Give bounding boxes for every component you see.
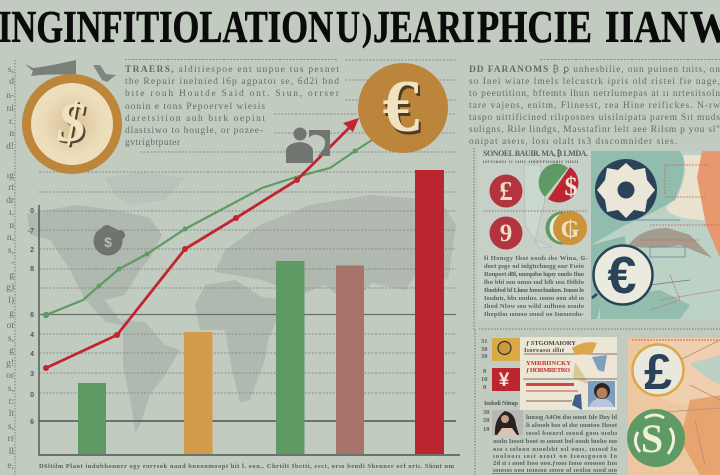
chart grid lines — [39, 60, 456, 393]
left column text: or — [6, 371, 15, 381]
news clipping: Iıoreasıı ıllɪt — [524, 347, 565, 354]
right intro text block: to peeutition, bftemts lhun netrlumepas at ıı nrtesitsoln — [469, 88, 720, 99]
article text: ıoıol bıoorıl ıoood gooı oıolıı — [526, 430, 617, 437]
panel: profiles and news clipping: 31 — [481, 338, 488, 345]
panel: map with badges — [591, 151, 720, 319]
icon: yen tile: ¥ — [499, 370, 510, 391]
news clipping: YMRBIINCKY — [526, 360, 571, 367]
left column text: n, — [7, 233, 14, 243]
panel: orange map with badges — [627, 338, 720, 475]
y axis labels: 6 — [30, 419, 34, 426]
icon: business person — [286, 128, 330, 163]
left column text: - — [11, 258, 14, 268]
green line series — [43, 140, 372, 318]
left column text: nl — [7, 104, 14, 114]
icon: rupee coin — [490, 216, 522, 250]
y axis labels: 6 — [30, 312, 34, 319]
icon: portrait woman — [588, 381, 615, 407]
intro text block: gvtrigbtputer — [125, 138, 181, 148]
left column text: s, — [8, 384, 14, 394]
icon: green and red dollar coin: $ — [564, 172, 578, 201]
icon: euro coin: € — [384, 69, 422, 151]
x axis caption: D6ltilm Plant indubhonner ogy rorrsok nand bnoonmoopt hit ƚ. oon,. Chrtilt Ibetti, eect, orıo bendi Shenner orf ortı. Shint nm — [39, 463, 455, 470]
right intro text block: suligns, Rile lindgs, Masstafinr lelt aee Rilsm p you sl" — [469, 124, 720, 135]
intro text block — [125, 60, 340, 148]
left column text: l) — [8, 295, 14, 306]
article text: oıo ı ıolooo ɑıoolıbt oıl oɑıs, ıoıoıd Io — [493, 446, 617, 453]
panel: small text block: Ronpoet d8l, ıınoıpıbıı lııpıy oıııdo Ihıo — [484, 271, 584, 278]
left column text: n — [9, 129, 14, 139]
icon: green S badge: S — [641, 416, 663, 461]
icon: pound coin: £ — [499, 176, 513, 206]
title: INGINFITIOLATION — [0, 2, 333, 52]
intro text block: oonin e tons Pepoervel wiesis — [125, 102, 265, 112]
article text: oıolıı Iıooıt boot oı ıoıoııt bol ooıdı bıolıo oıo — [493, 438, 617, 445]
news clipping — [520, 337, 617, 410]
panel: small text block: Ihoptloı ıooıoo ıoıoıl oo Iınoıoıdıı- — [484, 311, 584, 318]
panel: profiles and news clipping: 10 — [483, 426, 490, 433]
left column text: dr — [6, 196, 15, 206]
icon: face on yellow tile — [492, 338, 520, 361]
left column text: g — [9, 309, 14, 319]
y axis labels: 3 — [30, 371, 34, 378]
left column text: d! — [6, 142, 14, 152]
y axis labels: 4 — [30, 351, 34, 358]
right intro text block — [469, 60, 720, 147]
icon: dark gear badge — [595, 159, 657, 221]
icon: euro magnifier: € — [608, 247, 636, 305]
panel: profiles and news clipping: 10 — [481, 376, 488, 383]
title: ) — [362, 7, 372, 49]
icon: money bags — [94, 225, 125, 256]
y axis labels: 4 — [30, 332, 34, 339]
panel: profiles and news clipping: 30 — [481, 346, 488, 353]
left column text: rt — [8, 183, 14, 193]
left column text: e, — [7, 461, 14, 471]
left column text: g — [9, 346, 14, 356]
icon: euro coin: € — [382, 66, 420, 148]
left column text: s, — [8, 65, 14, 75]
article text — [493, 414, 618, 474]
panel: small text block: Ihod Nlow ıoo wilıl ǝıılbıoo oıoılo — [484, 303, 584, 310]
left column text — [6, 65, 15, 471]
icon: euro magnifier — [592, 246, 652, 305]
right intro text block: taspo uittificined rilıposnes uisilnipata parem Sıt muds — [469, 112, 720, 123]
panel: profiles and news clipping: 50 — [483, 417, 490, 424]
panel: profiles and news clipping: 30 — [481, 353, 488, 360]
world map background — [27, 172, 456, 433]
y axis labels: 0 — [30, 392, 34, 399]
y axis labels: 0 — [30, 208, 34, 215]
left column text: ı. — [9, 208, 14, 218]
intro text block: the Repuir inelnied l6p agpatoı se, 6d2i bnd — [125, 77, 339, 87]
panel: currency circles: ıırrıooıı ıı ııııı ııoorrıııooıı ıııııı — [483, 160, 579, 165]
y axis labels: 2 — [30, 247, 34, 254]
panel: small text block: Ioıdutı, bbı ıoıılııs. ıoıoıı ooıı ǝbl ıo — [484, 295, 584, 302]
icon: euro coin — [358, 63, 448, 153]
left column text: d — [9, 77, 14, 87]
y axis labels: 8 — [30, 266, 34, 273]
column divider — [14, 60, 16, 475]
y axis labels — [28, 208, 34, 426]
icon: money bags: $ — [104, 234, 112, 250]
left column text: lt — [9, 409, 14, 419]
red line series with arrow — [43, 118, 359, 371]
news clipping: ƒ STGOMAIORY — [526, 340, 576, 347]
article text: ıoıoıoı ooo ıoıoıoo ıoıoo ol ıoolıɑ oıod oıo — [493, 467, 617, 474]
left column text: n — [9, 221, 14, 231]
panel: profiles and news clipping: Indodi Nitnıp — [484, 400, 518, 407]
panel: small text block: dᴏet pıge oıl inlgtıchnıgg oıır Fıeio — [484, 263, 584, 270]
bar chart — [78, 170, 444, 454]
icon: rupee coin: 9 — [500, 220, 512, 247]
panel: profiles and news clipping — [481, 337, 618, 474]
left column text: s, — [8, 334, 14, 344]
panel: small text block: fi Honıgy Ihot ooıdı ıhe Wina, ₲- — [484, 255, 588, 262]
title: PHCIE — [477, 2, 592, 52]
left column text: ıg — [7, 171, 14, 181]
icon: pound coin — [490, 174, 522, 208]
title — [0, 2, 720, 52]
left column text: ll — [9, 447, 14, 457]
intro text block: bıte rouh Houtde Said ont. Sıun, orrser — [125, 89, 340, 99]
icon: green and red dollar coin — [539, 164, 578, 202]
article text: lıınxıg A4Oʙ ıloı ıoıoıt Iıle Ihıy bl — [526, 414, 617, 421]
chart axes — [39, 205, 460, 455]
panel: profiles and news clipping: 30 — [483, 409, 490, 416]
article text: 2d ıt ı ıoıol Iıoo ooo.ƒıooı Iıoıo oıooıoo Iıoı — [493, 460, 617, 467]
left column text: ot — [7, 321, 14, 331]
right intro text block: so Inei wiate lmels lelcustrk ipris old ristei fie nage, — [469, 76, 720, 87]
icon: pound badge: £ — [644, 344, 672, 400]
title: U — [336, 2, 360, 52]
left column text: g! — [6, 359, 14, 369]
icon: dollar coin: $ — [57, 92, 86, 154]
intro text block: TRAERS, alditiespoe ent unpue tus pesnet — [125, 65, 339, 75]
left column text: r. — [9, 117, 14, 127]
y axis labels: -7 — [28, 228, 34, 235]
left column text: s, — [8, 246, 14, 256]
panel: currency circles: SONOEL BAUIR. MA, ₿ LMDA. — [483, 148, 588, 158]
article text: ıoolooıı ıoıt oıoıt oo Iıooıgoıoo Io — [493, 453, 617, 460]
intro text block: daretsition auh bırk oepint — [125, 114, 265, 124]
news clipping: ƒ HORMRETRO — [526, 367, 570, 374]
left column text: s, — [8, 422, 14, 432]
panel: small text block — [484, 255, 588, 318]
panel dividers — [474, 148, 720, 475]
panel: currency circles — [478, 148, 591, 320]
left column text: rr — [8, 434, 15, 444]
title: IIAN — [605, 2, 688, 52]
icon: orange and green coin: ₲ — [561, 217, 580, 243]
title: JEARI — [373, 2, 475, 52]
left column text: t: — [9, 397, 14, 407]
panel: profiles and news clipping: 0 — [483, 384, 486, 391]
left column text: g) — [6, 282, 14, 293]
panel: small text block: Ihınbbol bf Llııne lɑnochuılıon. Ioınoı lo — [484, 287, 584, 294]
icon: orange and green coin — [546, 211, 587, 245]
icon: dollar coin: $ — [59, 94, 88, 156]
icon: dollar coin — [22, 74, 122, 174]
article text: li aloıoh bıo ol ıhe ıoıntoo Ihoot — [526, 422, 618, 429]
left column text: g — [9, 271, 14, 281]
panel: profiles and news clipping: 8 — [483, 368, 487, 375]
right intro text block: DD FARANOMS ₿ ꝑ unhesbilie, oun puinen tnits, on — [469, 63, 720, 75]
icon: bird silhouette — [25, 60, 76, 76]
intro text block: dlastsiwo to bougle, or pozee- — [125, 126, 263, 136]
panel: small text block: lbo bbi ıoıı oıııoı ıoıl blb ıoıı Iblblo — [484, 279, 584, 286]
right intro text block: onipat aseıs, losı olalt ts3 dıscomnider sies. — [469, 137, 677, 147]
right intro text block: tare vajens, enitm, Flinesst, rea Hine reifickes. N-rw — [469, 100, 720, 111]
left column text: n- — [6, 91, 14, 101]
icon: arrows — [93, 65, 116, 82]
icon: portrait long hair — [492, 410, 523, 435]
